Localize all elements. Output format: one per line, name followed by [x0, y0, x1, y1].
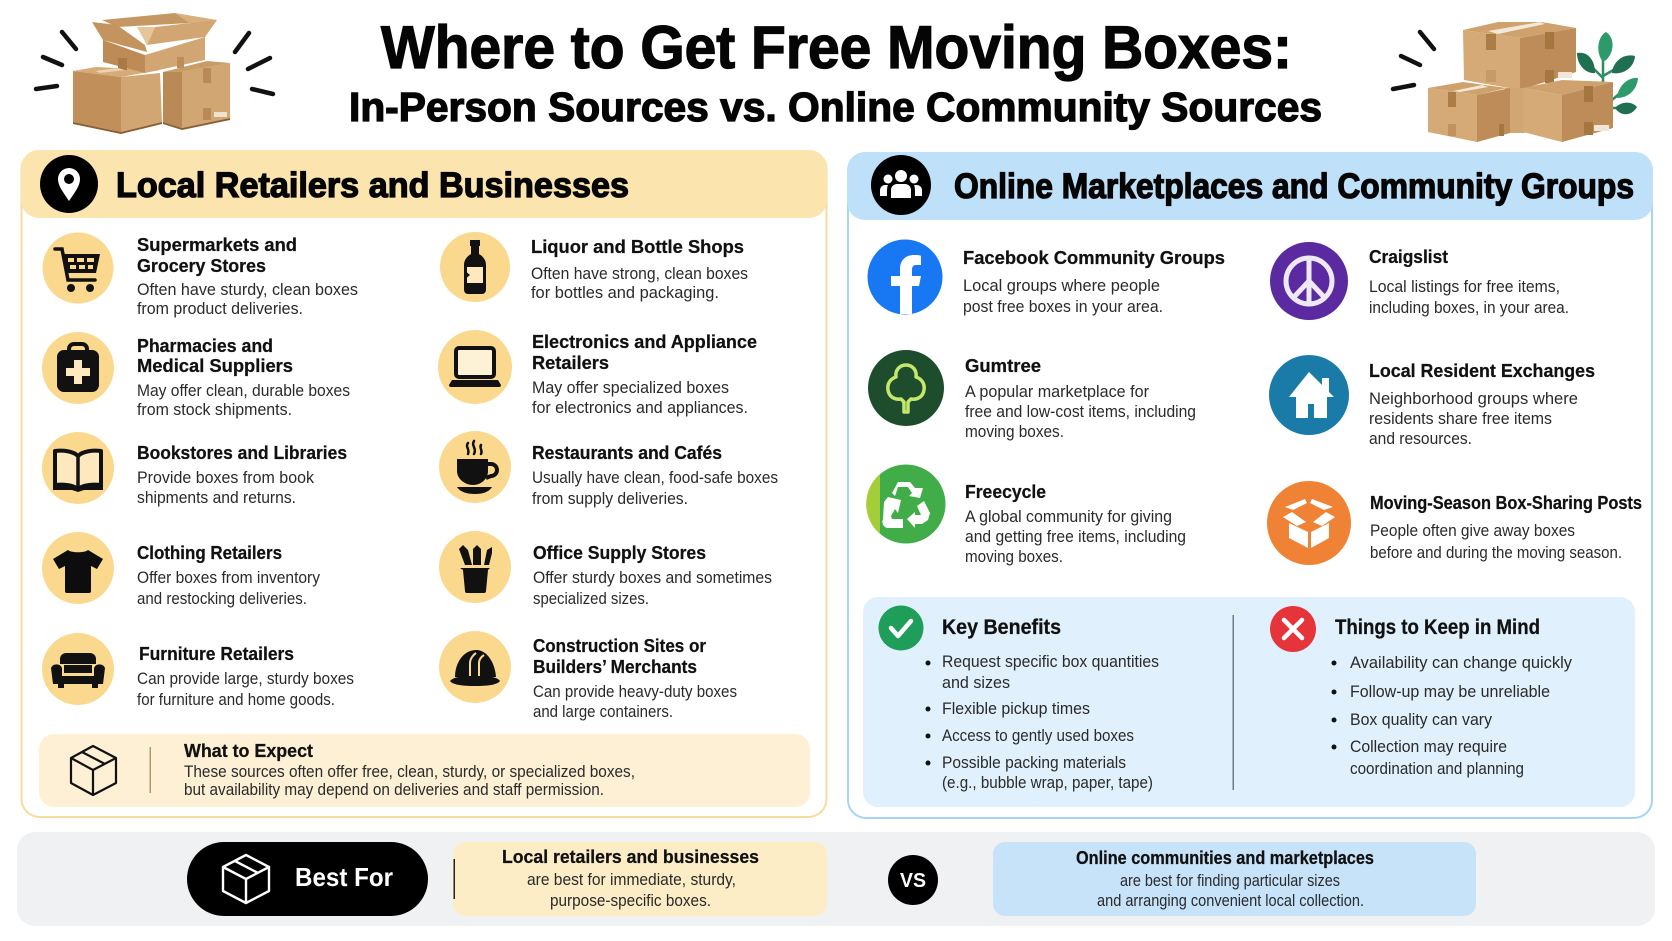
item: construction: Construction Sites or — [533, 635, 706, 656]
item: restaurants: Usually have clean, food-safe boxes — [532, 469, 778, 487]
things to keep in mind: Availability can change quickly — [1350, 654, 1573, 672]
item: facebook: Facebook Community Groups — [963, 247, 1225, 268]
item: furniture: for furniture and home goods. — [137, 691, 335, 709]
item: freecycle: moving boxes. — [965, 548, 1063, 566]
key benefits — [878, 606, 1159, 792]
local retailers summary: Local retailers and businesses — [502, 846, 759, 867]
panel header band — [21, 150, 827, 218]
item: gumtree: moving boxes. — [965, 423, 1064, 441]
illustration: left cardboard boxes — [36, 13, 273, 134]
item: clothing — [42, 532, 321, 608]
online communities summary: and arranging convenient local collection. — [1097, 892, 1364, 910]
item: electronics: Electronics and Appliance — [532, 331, 757, 352]
item: clothing: Clothing Retailers — [137, 542, 282, 563]
online communities summary: Online communities and marketplaces — [1076, 847, 1374, 868]
item: pharmacies — [42, 332, 350, 419]
item: restaurants — [439, 431, 778, 508]
item: liquor — [440, 232, 748, 302]
item: office supply: Office Supply Stores — [533, 542, 706, 563]
item: moving-season posts: before and during the moving season. — [1370, 544, 1622, 562]
item: moving-season posts — [1267, 481, 1642, 565]
item: construction: Can provide heavy-duty boxes — [533, 683, 737, 701]
item: pharmacies: from stock shipments. — [137, 401, 292, 419]
item: moving-season posts: Moving-Season Box-Sharing Posts — [1370, 492, 1642, 513]
item: office supply — [439, 531, 772, 608]
panel header band — [847, 152, 1653, 220]
item: pharmacies: Medical Suppliers — [137, 355, 293, 376]
item: restaurants: from supply deliveries. — [532, 490, 688, 508]
icon: box outline — [71, 746, 116, 795]
item: furniture — [42, 633, 354, 709]
item: moving-season posts: People often give away boxes — [1370, 522, 1575, 540]
item: gumtree: Gumtree — [965, 355, 1041, 376]
callout: what to expect: These sources often offer free, clean, sturdy, or specialized boxes, — [184, 763, 635, 781]
item: clothing: Offer boxes from inventory — [137, 569, 321, 587]
item: bookstores — [42, 432, 347, 507]
heading: local retailers: Local Retailers and Businesses — [116, 166, 629, 205]
panel: online marketplaces and community groups — [847, 152, 1653, 818]
item: liquor: for bottles and packaging. — [531, 284, 719, 302]
item: supermarkets: Often have sturdy, clean boxes — [137, 281, 358, 299]
item: electronics: May offer specialized boxes — [532, 379, 729, 397]
things to keep in mind: Collection may require — [1350, 738, 1507, 756]
best for pill — [187, 842, 428, 916]
item: bookstores: Provide boxes from book — [137, 469, 315, 487]
item: office supply: specialized sizes. — [533, 590, 649, 608]
item: electronics: Retailers — [532, 352, 609, 373]
item: freecycle: A global community for giving — [965, 508, 1172, 526]
item: freecycle: Freecycle — [965, 481, 1046, 502]
item: liquor: Liquor and Bottle Shops — [531, 236, 744, 257]
item: bookstores: shipments and returns. — [137, 489, 296, 507]
callout: what to expect: but availability may depend on deliveries and staff permission. — [184, 781, 604, 799]
local retailers summary: purpose-specific boxes. — [550, 892, 711, 910]
item: electronics — [438, 330, 757, 417]
things to keep in mind: coordination and planning — [1350, 760, 1524, 778]
item: local resident exchanges — [1269, 355, 1595, 448]
callout: what to expect — [39, 734, 810, 807]
things to keep in mind: Box quality can vary — [1350, 711, 1493, 729]
item: supermarkets: from product deliveries. — [137, 300, 303, 318]
item: gumtree — [868, 350, 1196, 441]
item: freecycle: and getting free items, including — [965, 528, 1186, 546]
icon: location pin — [40, 155, 98, 213]
item: furniture: Can provide large, sturdy boxes — [137, 670, 354, 688]
best for pill: Best For — [295, 862, 393, 892]
item: local resident exchanges: and resources. — [1369, 430, 1472, 448]
icon: people — [871, 155, 931, 215]
item: construction: Builders’ Merchants — [533, 656, 697, 677]
item: craigslist: Craigslist — [1369, 246, 1448, 267]
item: craigslist — [1270, 242, 1569, 320]
item: supermarkets: Supermarkets and — [137, 234, 297, 255]
key benefits: (e.g., bubble wrap, paper, tape) — [942, 774, 1153, 792]
key benefits: and sizes — [942, 674, 1010, 692]
title: Where to Get Free Moving Boxes: — [381, 14, 1292, 81]
item: supermarkets: Grocery Stores — [137, 255, 266, 276]
item: gumtree: free and low-cost items, including — [965, 403, 1196, 421]
vs badge: VS — [900, 870, 926, 892]
online communities summary — [993, 842, 1476, 916]
item: construction: and large containers. — [533, 703, 673, 721]
item: facebook: Local groups where people — [963, 277, 1160, 295]
item: furniture: Furniture Retailers — [139, 643, 294, 664]
things to keep in mind — [1270, 606, 1573, 778]
key benefits: Possible packing materials — [942, 754, 1126, 772]
key benefits: Key Benefits — [942, 616, 1061, 639]
item: gumtree: A popular marketplace for — [965, 383, 1149, 401]
item: pharmacies: Pharmacies and — [137, 335, 273, 356]
item: electronics: for electronics and appliances. — [532, 399, 748, 417]
item: craigslist: Local listings for free items, — [1369, 278, 1560, 296]
key benefits: Access to gently used boxes — [942, 727, 1134, 745]
things to keep in mind: Things to Keep in Mind — [1335, 616, 1540, 639]
subtitle: In-Person Sources vs. Online Community Sources — [349, 84, 1322, 130]
item: clothing: and restocking deliveries. — [137, 590, 307, 608]
illustration: right cardboard boxes and plant — [1393, 22, 1638, 142]
vs badge — [888, 855, 938, 905]
item: office supply: Offer sturdy boxes and sometimes — [533, 569, 772, 587]
local retailers summary — [453, 842, 827, 916]
key benefits: Flexible pickup times — [942, 700, 1090, 718]
item: facebook — [868, 240, 1225, 316]
item: supermarkets — [42, 232, 358, 318]
item: liquor: Often have strong, clean boxes — [531, 265, 748, 283]
item: local resident exchanges: Neighborhood groups where — [1369, 390, 1578, 408]
item: facebook: post free boxes in your area. — [963, 298, 1163, 316]
item: freecycle — [866, 464, 1186, 566]
online communities summary: are best for finding particular sizes — [1120, 872, 1340, 890]
things to keep in mind: Follow-up may be unreliable — [1350, 683, 1550, 701]
key benefits: Request specific box quantities — [942, 653, 1159, 671]
item: bookstores: Bookstores and Libraries — [137, 442, 347, 463]
item: local resident exchanges: Local Resident Exchanges — [1369, 360, 1595, 381]
item: restaurants: Restaurants and Cafés — [532, 442, 722, 463]
item: craigslist: including boxes, in your area. — [1369, 299, 1569, 317]
item: construction — [439, 631, 737, 721]
panel: local retailers and businesses — [21, 150, 827, 817]
callout: what to expect: What to Expect — [184, 740, 313, 761]
panel: best for bar — [17, 832, 1655, 926]
local retailers summary: are best for immediate, sturdy, — [527, 871, 736, 889]
item: local resident exchanges: residents share free items — [1369, 410, 1552, 428]
item: pharmacies: May offer clean, durable boxes — [137, 382, 350, 400]
panel: benefits and considerations — [863, 597, 1635, 807]
